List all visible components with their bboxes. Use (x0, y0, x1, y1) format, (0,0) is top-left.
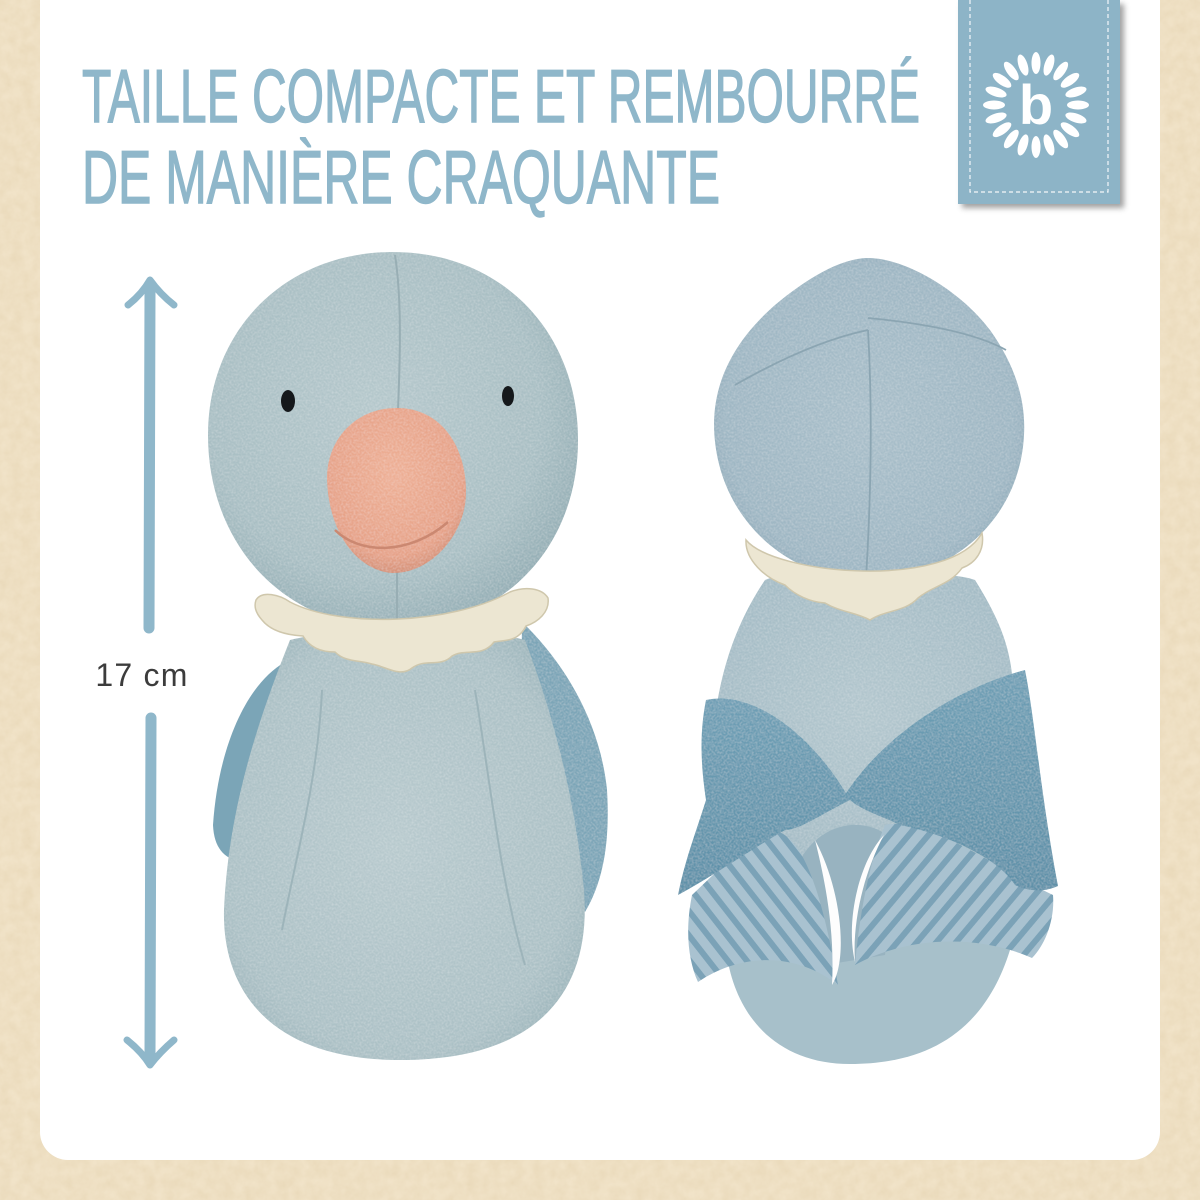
head seams (735, 318, 1006, 578)
icon: flower logo (983, 52, 1089, 158)
beak (327, 408, 466, 573)
tail (800, 825, 900, 965)
title: DE MANIÈRE CRAQUANTE (82, 135, 720, 219)
torso (716, 571, 1013, 860)
lace collar (746, 533, 983, 620)
muslin wing left (678, 698, 850, 895)
head (208, 252, 578, 628)
icon: flower logo: b (1019, 73, 1053, 136)
toy: front view (208, 252, 608, 1060)
muslin wing right (845, 670, 1058, 890)
dimension label: 17 cm (95, 657, 189, 693)
lower body (726, 912, 1010, 1064)
toy: back view (678, 258, 1058, 1064)
eyes (281, 390, 295, 412)
body (224, 629, 585, 1060)
near wing left (213, 662, 290, 862)
head seam (395, 255, 400, 625)
lace collar (255, 589, 548, 672)
striped wing right (855, 824, 1053, 965)
dimension arrow: height (127, 280, 174, 1065)
head (714, 258, 1024, 580)
white lining (815, 835, 884, 985)
far wing right (520, 622, 608, 912)
brand tag with logo (958, 0, 1124, 208)
body seams (282, 690, 525, 965)
striped wing left (688, 829, 838, 985)
title (82, 54, 920, 219)
